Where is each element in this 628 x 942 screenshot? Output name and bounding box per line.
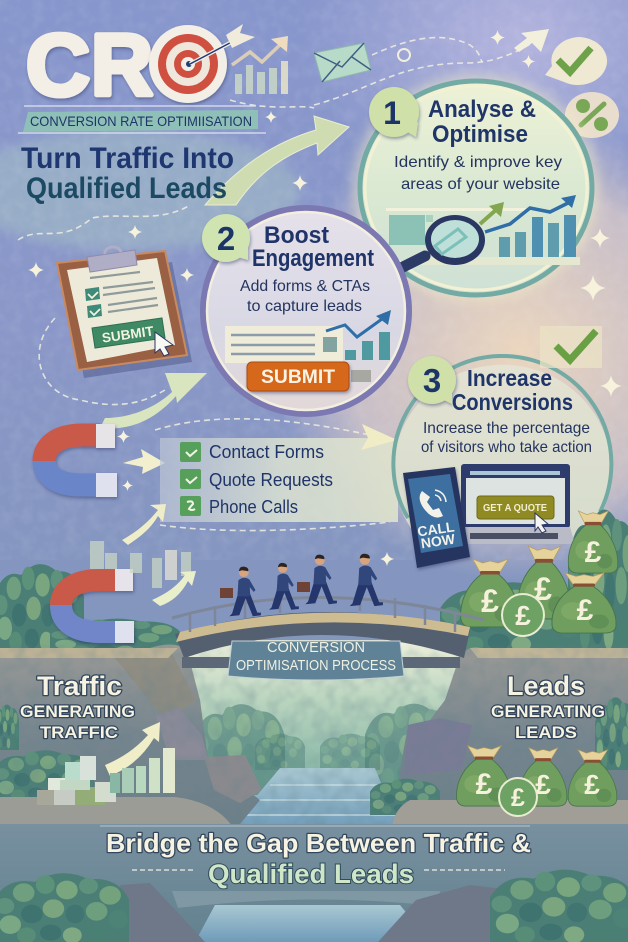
heading 1: Optimise — [432, 121, 528, 148]
clipboard submit button: SUBMIT — [101, 323, 155, 346]
bag back right: £ — [585, 536, 602, 569]
briefcases — [220, 582, 310, 598]
leads label: GENERATING — [491, 702, 605, 721]
bridge sign: OPTIMISATION PROCESS — [236, 658, 396, 674]
sparkles — [28, 30, 622, 566]
traffic blocks — [37, 756, 116, 805]
growth chart — [420, 195, 580, 265]
traffic label: TRAFFIC — [40, 723, 118, 742]
coin: £ — [515, 600, 531, 631]
phone: CALL — [416, 518, 456, 540]
magnifying glass — [397, 215, 485, 270]
copy 3: of visitors who take action — [421, 439, 592, 456]
clipboard icon — [57, 247, 192, 378]
bag left: £ — [476, 768, 493, 801]
rising blocks behind magnet — [90, 541, 191, 588]
person 4 — [350, 554, 383, 606]
headline: Qualified Leads — [26, 172, 227, 205]
bottom dashes — [132, 869, 505, 871]
copy 2 — [240, 278, 370, 315]
headline — [21, 142, 234, 205]
copy 3: Increase the percentage — [423, 420, 590, 437]
website panel — [386, 208, 526, 245]
copy 1: Identify & improve key — [394, 154, 562, 171]
bag right: £ — [584, 769, 600, 800]
money bags lower — [456, 746, 617, 816]
panel: step 3 increase conversions — [393, 326, 612, 540]
submit button: SUBMIT — [261, 367, 335, 388]
traffic label: Traffic — [37, 671, 122, 701]
copy 1 — [394, 154, 562, 193]
quote requests row: Quote Requests — [209, 470, 333, 490]
heading 3: Conversions — [452, 389, 573, 415]
right cliff — [370, 647, 628, 830]
heading 3: Increase — [467, 365, 552, 391]
bottom headline: Bridge the Gap Between Traffic & — [106, 828, 531, 858]
subtitle band: CONVERSION RATE OPTIMIISATION — [30, 113, 252, 129]
bridge — [172, 593, 484, 668]
traffic label — [20, 671, 135, 742]
badge 1 — [369, 87, 419, 137]
bridge sign: CONVERSION — [267, 639, 365, 656]
person 2 — [269, 563, 299, 610]
dart — [190, 24, 255, 64]
percent bubble — [565, 92, 619, 138]
panel: step 1 analyse — [352, 74, 600, 302]
traffic arrow — [105, 722, 160, 776]
logo: CRO — [26, 17, 255, 114]
small bar chart by logo — [232, 36, 288, 94]
copy 3 — [421, 420, 592, 456]
envelope icon — [314, 43, 371, 82]
copy 2: Add forms & CTAs — [240, 278, 370, 295]
check bubble — [545, 37, 607, 85]
person 3 — [305, 555, 337, 604]
heading 2: Boost — [264, 222, 329, 249]
bottom band — [0, 824, 628, 942]
lower ledges — [0, 797, 628, 826]
rock mottling — [0, 645, 628, 942]
heading 2 — [252, 222, 374, 272]
heading 1 — [428, 96, 536, 148]
traffic label: GENERATING — [20, 702, 135, 721]
leads label: Leads — [507, 671, 585, 701]
foreground bushes — [0, 870, 628, 942]
copy 2: to capture leads — [247, 298, 362, 315]
submit button — [247, 362, 349, 391]
money bags upper — [461, 511, 618, 636]
bag back right — [568, 511, 618, 573]
get a quote button: GET A QUOTE — [483, 502, 547, 514]
bag front right: £ — [577, 594, 594, 627]
panel: lead types checklist — [160, 438, 398, 522]
coin — [502, 594, 544, 636]
cursor — [155, 332, 173, 356]
bag middle: £ — [535, 769, 551, 800]
dashed flow lines — [18, 38, 540, 531]
bag middle — [519, 748, 567, 806]
lower sweep arrow — [100, 373, 207, 428]
arrow from lower magnet — [152, 571, 196, 606]
sparkle arrow from magnet — [123, 449, 165, 474]
bag front left: £ — [481, 583, 499, 619]
heading 3 — [452, 365, 573, 415]
phone — [403, 467, 470, 568]
phone calls row — [180, 496, 298, 517]
bag front left — [461, 559, 519, 627]
badge 1: 1 — [383, 95, 401, 131]
check note — [540, 326, 602, 368]
business people walking — [220, 554, 383, 616]
form — [225, 326, 371, 382]
coin: £ — [511, 784, 525, 812]
phone calls row: Phone Calls — [209, 497, 298, 517]
bottom headline: Qualified Leads — [208, 859, 414, 889]
bag back centre — [517, 546, 571, 619]
copy 1: areas of your website — [401, 176, 560, 193]
coin — [499, 778, 537, 816]
lower bridge and river — [120, 883, 512, 942]
bag back centre: £ — [534, 571, 552, 607]
laptop — [461, 464, 575, 544]
magnet lower — [61, 569, 134, 643]
background bushes upper — [0, 510, 628, 655]
phone: NOW — [420, 531, 457, 551]
left cliff — [0, 644, 262, 830]
badge 2: 2 — [217, 220, 235, 257]
badge 2 — [202, 214, 250, 262]
arrow into step 3 — [361, 424, 397, 450]
upper right arrow head — [514, 29, 549, 52]
person 1 — [229, 567, 261, 616]
letters CR: C — [26, 17, 90, 114]
heading 2: Engagement — [252, 245, 374, 272]
bag front right — [552, 573, 616, 633]
arrow up from chart — [122, 504, 166, 545]
traffic bar chart — [110, 748, 175, 793]
mini chart — [326, 310, 391, 360]
top sweep arrow — [205, 116, 349, 205]
gorge backdrop — [185, 640, 465, 830]
letters CR: R — [91, 17, 153, 114]
bag left — [456, 746, 512, 806]
bridge sign — [228, 639, 404, 680]
bottom headline — [106, 828, 531, 889]
bag right — [568, 750, 617, 806]
headline: Turn Traffic Into — [21, 142, 234, 175]
badge 3: 3 — [423, 362, 441, 399]
magnet top — [44, 424, 117, 497]
leads label: LEADS — [515, 723, 577, 742]
subtitle band — [18, 106, 266, 133]
target — [149, 25, 227, 103]
contact forms row: Contact Forms — [209, 442, 324, 462]
letters CR — [26, 17, 153, 114]
cursor — [535, 513, 548, 533]
badge 3 — [408, 356, 456, 404]
heading 1: Analyse & — [428, 96, 536, 123]
panel: step 2 boost engagement — [202, 208, 409, 414]
leads label — [491, 671, 605, 742]
